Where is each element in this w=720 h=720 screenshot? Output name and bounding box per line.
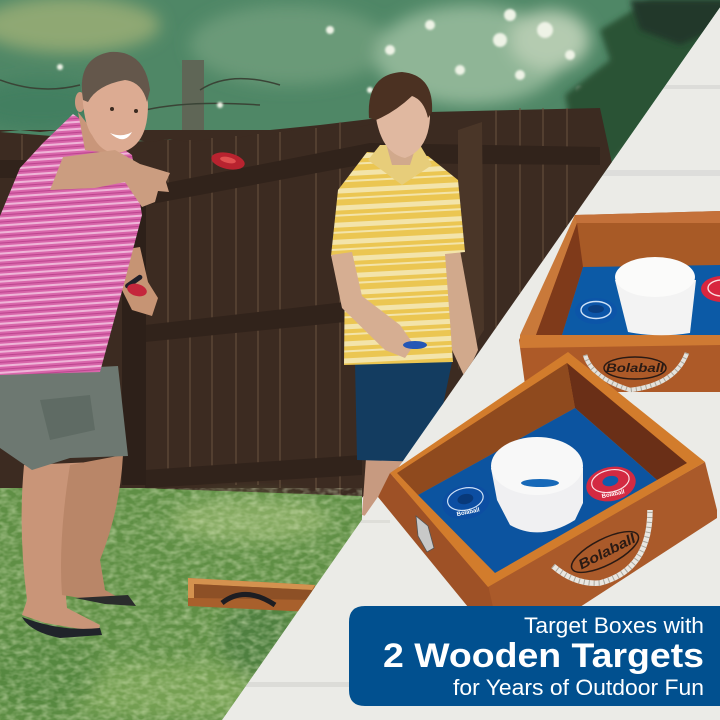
boy shorts	[355, 362, 452, 462]
cup	[491, 437, 583, 532]
ear	[75, 92, 85, 112]
head	[82, 80, 148, 152]
tree trunk and branches	[182, 60, 204, 130]
red ring: Bolaball	[601, 489, 626, 500]
far arm and hand	[122, 247, 158, 316]
pointing arm	[50, 150, 170, 207]
banner line 1: Target Boxes with	[524, 613, 704, 638]
rope	[553, 510, 650, 583]
back box felt	[562, 265, 720, 335]
left face	[378, 473, 495, 607]
evergreen tree	[565, 0, 720, 165]
back box rim top	[575, 211, 720, 223]
back box body	[519, 211, 720, 392]
man legs	[22, 462, 100, 632]
trees background	[0, 0, 720, 190]
rim	[390, 352, 705, 587]
man: pink shirt	[0, 52, 170, 638]
back rope	[585, 353, 687, 390]
back logo: Bolaball	[606, 361, 665, 375]
flip flops	[22, 617, 102, 638]
boy far arm	[444, 250, 478, 378]
shorts	[0, 366, 128, 470]
right inner wall	[567, 363, 687, 480]
latch	[416, 516, 434, 552]
flying red ring	[211, 152, 245, 170]
boy leg	[362, 458, 405, 516]
small target box on grass	[188, 578, 315, 612]
boy ring	[403, 341, 427, 349]
banner line 3: for Years of Outdoor Fun	[453, 675, 704, 700]
right face	[488, 462, 717, 607]
back logo	[604, 357, 666, 379]
banner	[349, 606, 720, 706]
front target box	[378, 352, 717, 607]
boy neck and collar	[368, 145, 432, 185]
felt	[418, 408, 657, 573]
back box rim	[520, 335, 720, 348]
back blue ring	[575, 298, 617, 324]
grass	[0, 488, 362, 720]
left inner wall	[397, 363, 575, 495]
logo	[566, 524, 644, 580]
back box left rim	[520, 215, 577, 335]
neck	[78, 112, 107, 152]
banner line 2: 2 Wooden Targets	[383, 637, 704, 675]
back target box	[519, 211, 720, 392]
back red ring	[701, 276, 720, 302]
boy	[331, 72, 478, 520]
wooden fence	[0, 108, 620, 500]
red ring	[583, 462, 639, 506]
shirt	[0, 114, 142, 375]
boy shirt	[331, 152, 465, 365]
back cup	[615, 257, 696, 335]
boy head	[376, 90, 430, 158]
blue ring: Bolaball	[456, 507, 481, 518]
back box inner wall	[577, 223, 720, 267]
blue ring	[439, 480, 493, 524]
logo: Bolaball	[576, 529, 639, 572]
boy near arm	[331, 252, 414, 358]
